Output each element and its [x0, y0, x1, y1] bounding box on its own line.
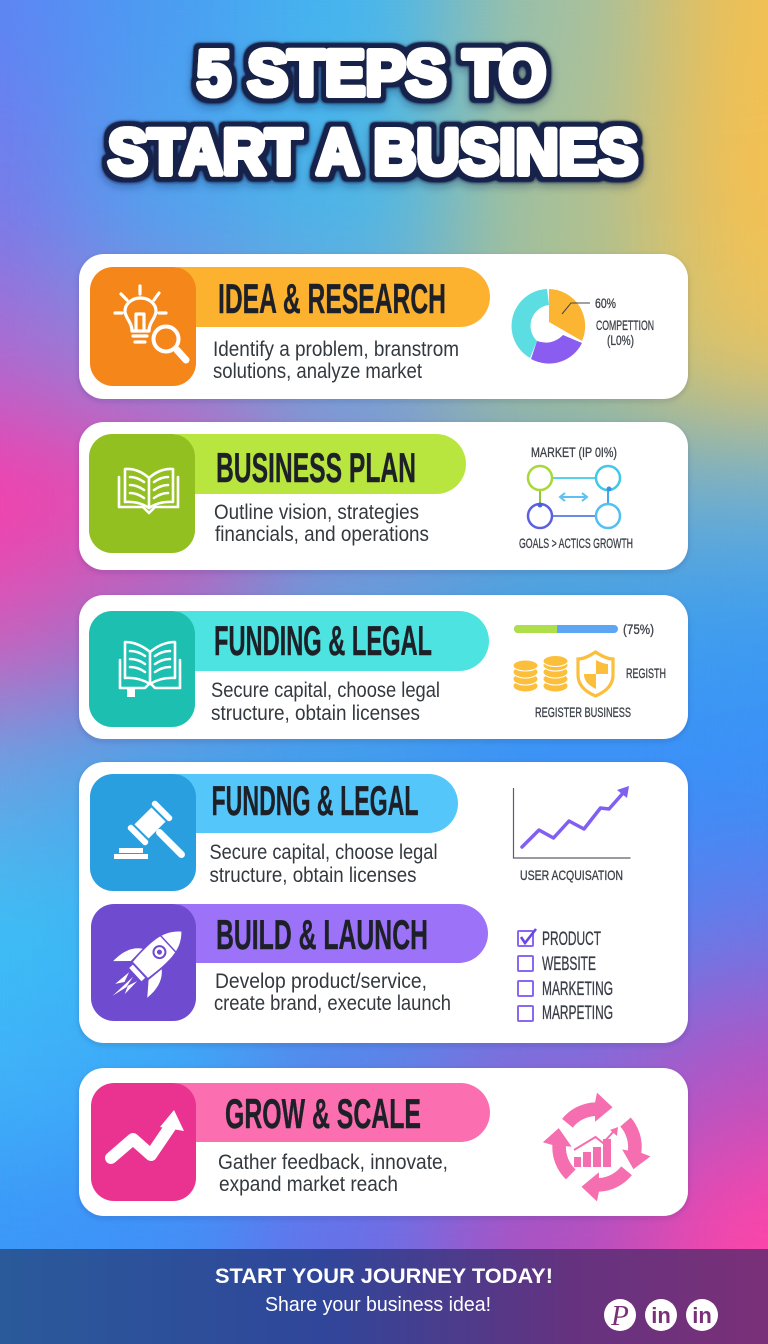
checklist: launch tasks: [518, 929, 613, 1024]
text: grow and scale description: [218, 1151, 448, 1196]
diagram: market goals flow: MARKET (IP 0I%): [531, 444, 617, 460]
text: funding and legal description: [211, 679, 440, 725]
chart: user acquisition line: [514, 786, 630, 883]
text: funding and legal description: structure, obtain licenses: [211, 702, 420, 725]
icon: rocket: [91, 904, 199, 1021]
text: funding and legal description: Secure capital, choose legal: [211, 679, 440, 702]
footer banner: [0, 1249, 768, 1344]
checklist: launch tasks: MARKETING: [542, 979, 613, 1000]
text: fundng and legal description: Secure capital, choose legal: [210, 841, 438, 864]
panel: step 3 funding and legal: [79, 595, 688, 739]
text: idea and research description: Identify a problem, branstrom: [213, 338, 459, 361]
icon: shield: [578, 652, 613, 696]
title: START A BUSINES: [108, 116, 638, 188]
labels: register business: REGISTH: [626, 665, 666, 681]
heading bar: fundng and legal: [150, 774, 458, 833]
icon: open book: [89, 434, 195, 553]
heading bar: build and launch: BUILD & LAUNCH: [216, 911, 428, 958]
icon: book with bookmark: [89, 611, 195, 727]
heading bar: grow and scale: GROW & SCALE: [225, 1090, 421, 1137]
text: build and launch description: create brand, execute launch: [214, 992, 451, 1015]
panel: step 5 grow and scale: [79, 1068, 688, 1216]
icon: gavel: [90, 774, 198, 891]
chart: donut with competition labels: [512, 289, 654, 364]
title: [108, 37, 638, 188]
chart: progress bar 75 percent: (75%): [623, 621, 654, 637]
checklist: launch tasks: WEBSITE: [542, 954, 596, 975]
text: grow and scale description: expand market reach: [219, 1173, 398, 1196]
icon: rising arrow: [91, 1083, 196, 1201]
panel: step 2 business plan: [79, 422, 688, 570]
panel: steps 4 combined funding and build: [79, 762, 688, 1043]
heading bar: build and launch: [150, 904, 488, 963]
social icons: [604, 1299, 718, 1332]
heading bar: fundng and legal: FUNDNG & LEGAL: [212, 777, 418, 824]
chart: donut with competition labels: 60%: [595, 295, 616, 311]
icon: growth cycle arrows: [540, 1093, 657, 1201]
text: business plan description: Outline vision, strategies: [214, 501, 419, 524]
heading bar: funding and legal: [150, 611, 489, 671]
heading bar: business plan: [150, 434, 466, 494]
text: idea and research description: solutions, analyze market: [213, 360, 422, 383]
footer call to action: START YOUR JOURNEY TODAY!: [215, 1264, 553, 1288]
text: idea and research description: [213, 338, 459, 383]
icon: light bulb and magnifier: [90, 267, 196, 386]
heading bar: grow and scale: [150, 1083, 490, 1142]
text: build and launch description: [214, 970, 451, 1015]
checklist: launch tasks: PRODUCT: [542, 929, 601, 950]
checklist: launch tasks: MARPETING: [542, 1003, 613, 1024]
diagram: market goals flow: [519, 444, 633, 551]
text: fundng and legal description: structure, obtain licenses: [210, 864, 416, 887]
labels: register business: [535, 665, 666, 720]
heading bar: business plan: BUSINESS PLAN: [216, 444, 416, 491]
heading bar: funding and legal: FUNDING & LEGAL: [214, 617, 432, 664]
heading bar: idea and research: [150, 267, 490, 327]
social icons: in: [692, 1303, 712, 1328]
chart: donut with competition labels: (L0%): [607, 332, 634, 348]
social icons: P: [610, 1300, 629, 1332]
text: business plan description: financials, and operations: [215, 523, 429, 546]
chart: progress bar 75 percent: [514, 621, 654, 637]
heading bar: idea and research: IDEA & RESEARCH: [218, 275, 446, 322]
text: build and launch description: Develop product/service,: [215, 970, 427, 993]
chart: donut with competition labels: COMPETTION: [596, 317, 654, 333]
title: 5 STEPS TO: [197, 37, 546, 109]
footer call to action: Share your business idea!: [265, 1294, 491, 1316]
icon: coin stacks: [513, 656, 568, 692]
text: business plan description: [214, 501, 429, 546]
social icons: in: [651, 1303, 671, 1328]
text: grow and scale description: Gather feedback, innovate,: [218, 1151, 448, 1174]
panel: step 1 idea and research: [79, 254, 688, 399]
labels: register business: REGISTER BUSINESS: [535, 704, 631, 720]
chart: user acquisition line: USER ACQUISATION: [520, 867, 623, 883]
footer call to action: [215, 1264, 553, 1316]
diagram: market goals flow: GOALS > ACTICS GROWTH: [519, 535, 633, 551]
text: fundng and legal description: [210, 841, 438, 887]
